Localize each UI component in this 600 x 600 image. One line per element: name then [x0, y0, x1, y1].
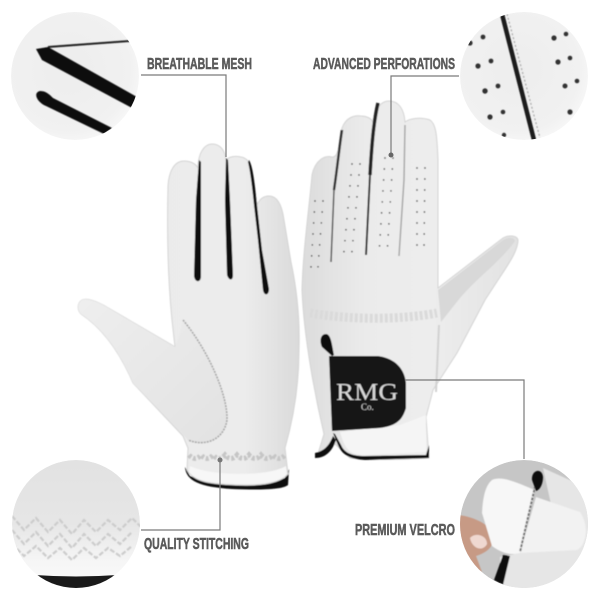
- callout: quality stitching: [12, 458, 249, 589]
- callout: premium velcro: [355, 380, 592, 592]
- thumb seam: [436, 325, 439, 392]
- label: QUALITY STITCHING: [144, 536, 249, 553]
- thumb shading: [438, 238, 515, 322]
- glove body: [302, 101, 518, 460]
- cuff black edge: [315, 433, 429, 460]
- leader line: [141, 460, 220, 530]
- label: PREMIUM VELCRO: [355, 522, 455, 539]
- finger seams: [334, 130, 342, 190]
- left glove (palm view): [78, 144, 299, 490]
- thumb shading: [78, 299, 227, 443]
- callout: advanced perforations: [313, 12, 588, 158]
- detail circle: perforations: [460, 12, 588, 140]
- leader line: [141, 75, 226, 157]
- detail circle: stitching: [12, 460, 142, 589]
- glove body: [78, 144, 299, 485]
- logo text: RMG: [336, 380, 398, 406]
- thumb: [460, 515, 492, 572]
- leader line: [405, 380, 524, 459]
- perforations: [311, 158, 425, 267]
- cuff white trim: [340, 415, 426, 455]
- thumb seam stitching: [183, 320, 227, 443]
- cuff white trim: [189, 466, 287, 484]
- velcro pads: [482, 479, 535, 554]
- black edge: [494, 555, 510, 585]
- velcro logo patch: [329, 356, 406, 431]
- velcro tab loop: [321, 334, 334, 356]
- label: ADVANCED PERFORATIONS: [313, 56, 455, 73]
- glove surface: [500, 468, 592, 592]
- wrist texture band: [310, 313, 437, 318]
- black loop: [532, 471, 543, 491]
- detail circle: velcro: [455, 460, 592, 592]
- leader line: [391, 76, 459, 155]
- label: BREATHABLE MESH: [147, 56, 252, 73]
- right glove (back view): [302, 101, 518, 460]
- leader end dot: [388, 152, 394, 158]
- strap slit: [520, 478, 537, 552]
- glove cuff black edge: [185, 467, 289, 490]
- callout: breathable mesh: [11, 12, 252, 157]
- cuff elastic stitching: [189, 455, 285, 458]
- detail circle: mesh: [11, 12, 139, 140]
- right glove (back view): Co.: [361, 402, 374, 412]
- finger gaps mesh: [194, 160, 201, 281]
- leader end dot: [218, 458, 222, 462]
